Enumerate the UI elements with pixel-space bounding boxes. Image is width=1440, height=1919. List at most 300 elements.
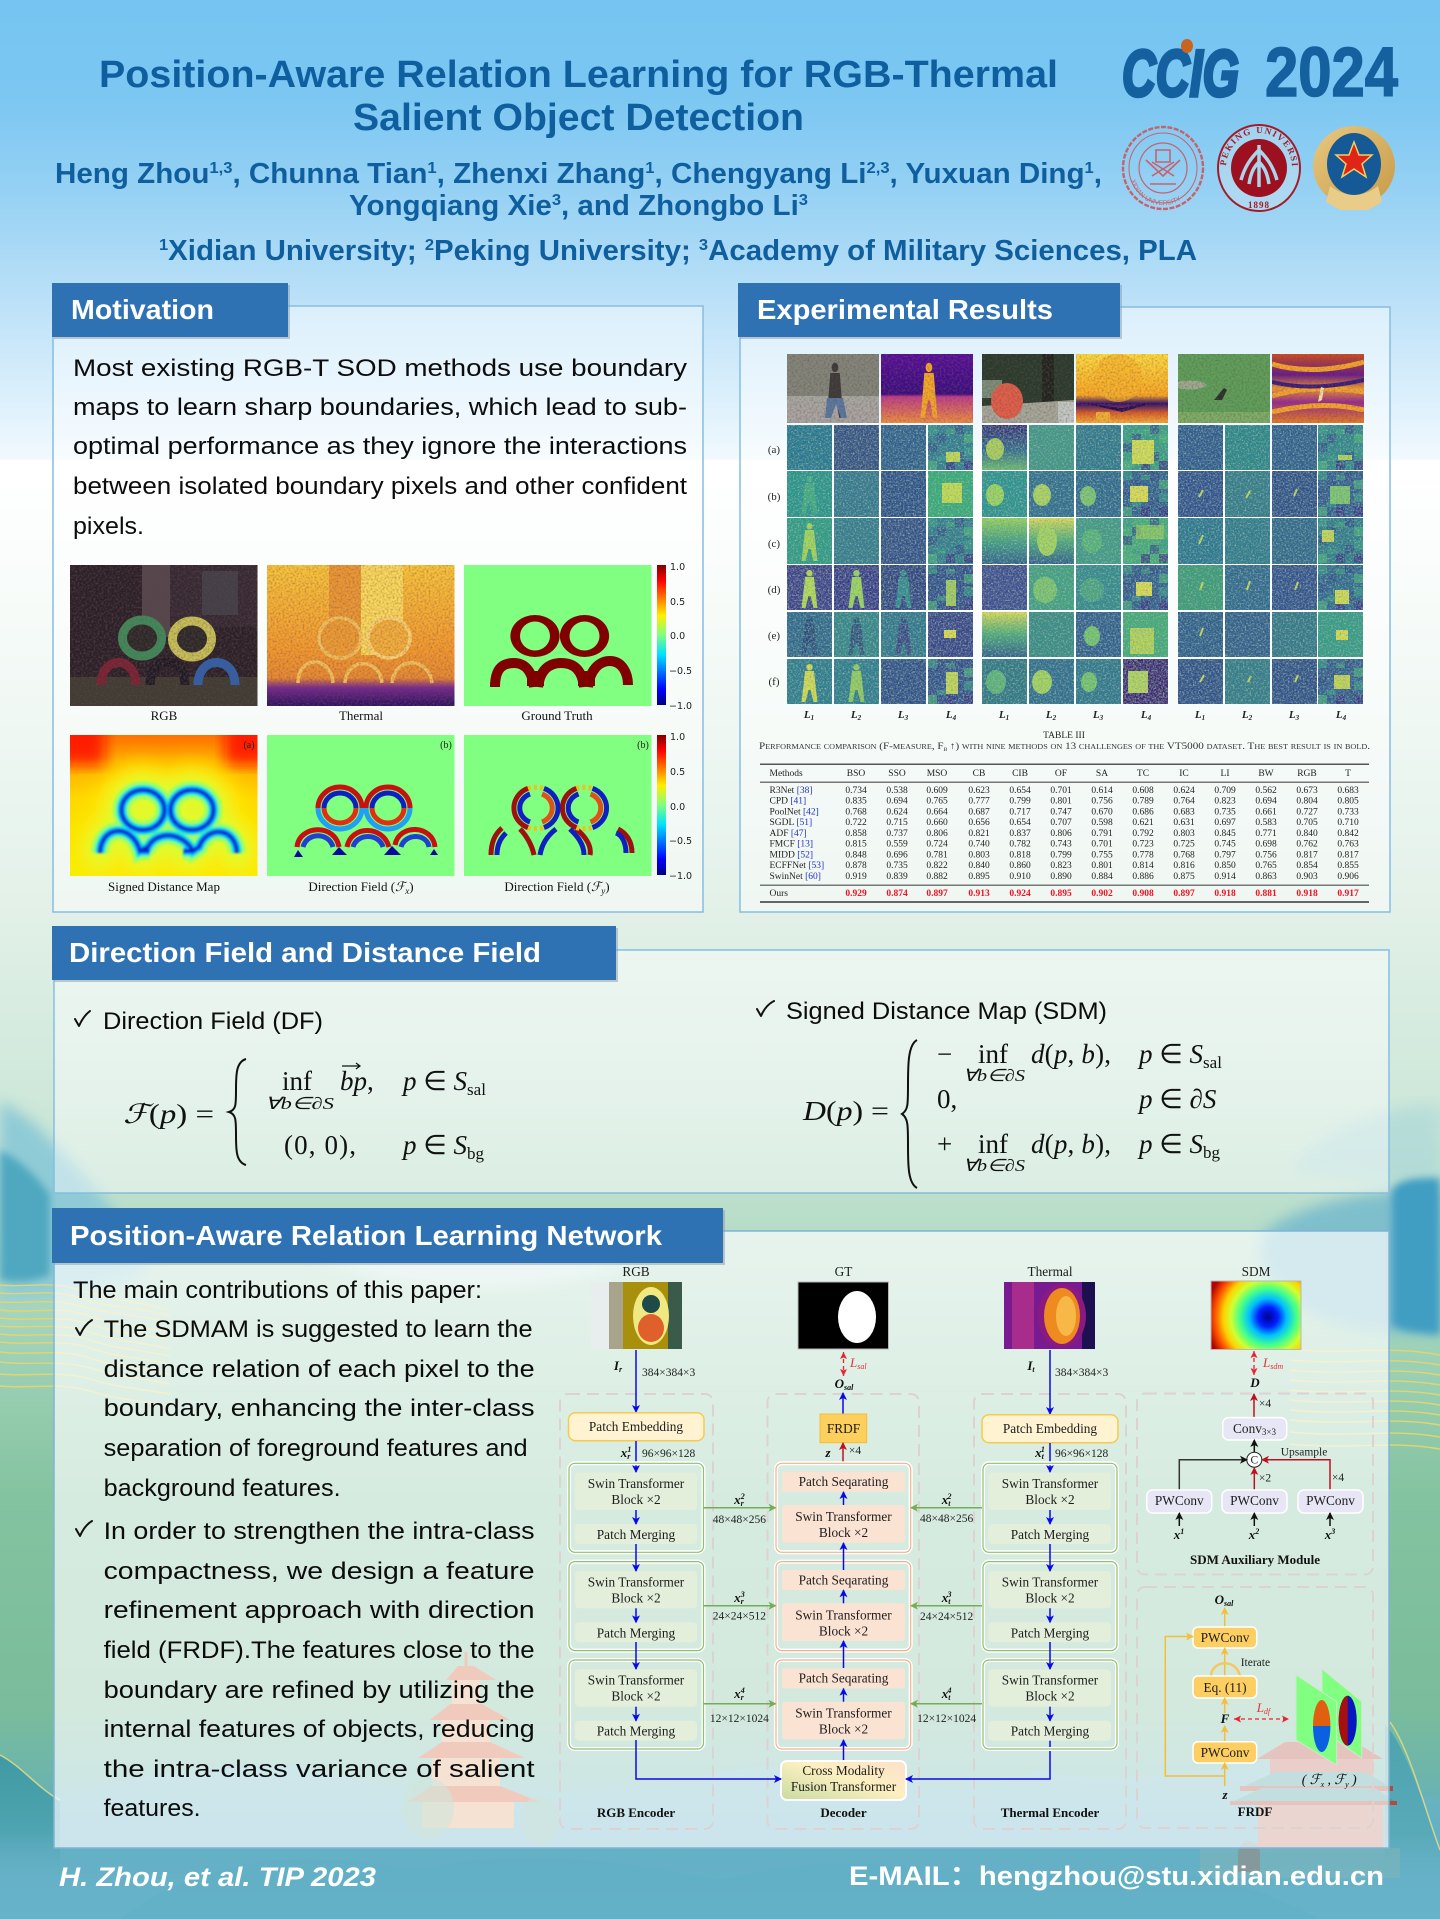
table: performance comparison: 0.803 [968, 850, 990, 860]
FRDF module: PWConv [1201, 1745, 1250, 1760]
SDM auxiliary module: ×2 [1259, 1472, 1271, 1484]
text block: main contributions: compactness, we design a feature [104, 1558, 535, 1585]
skip connections: t [948, 1499, 951, 1508]
skip connections: 2 [946, 1492, 951, 1501]
table: performance comparison: 0.823 [1214, 796, 1236, 806]
table: performance comparison: 0.768 [845, 808, 867, 818]
skip connections [704, 1492, 982, 1725]
table: performance comparison: IC [1179, 769, 1189, 779]
row labels (a)-(f): (e) [768, 630, 780, 642]
table: performance comparison: 0.801 [1091, 861, 1113, 871]
colorbar: bottom row: 0.0 [670, 802, 685, 813]
heading: Experimental Results [738, 283, 1122, 339]
SDM auxiliary module: 2 [1254, 1527, 1259, 1536]
image: direction field Fx: ) [409, 879, 414, 894]
table: performance comparison: 0.897 [926, 889, 948, 899]
affiliations: Xidian University; [168, 235, 425, 267]
formula: direction field: bg [467, 1144, 485, 1163]
colorbar: top row: −0.5 [669, 666, 692, 677]
thermal encoder column: Swin Transformer [1002, 1476, 1099, 1491]
decoder column: Swin Transformer [795, 1509, 892, 1524]
table: performance comparison: CIB [1012, 769, 1028, 779]
text block: main contributions: internal features of objects, reducing [104, 1716, 535, 1743]
decoder column: O [835, 1376, 844, 1391]
table: performance comparison: RGB [1297, 769, 1317, 779]
skip connections: x [942, 1492, 948, 1507]
RGB encoder column: x [621, 1445, 627, 1460]
table: performance comparison: 0.906 [1337, 872, 1359, 882]
diagram: network architecture [560, 1264, 1373, 1829]
table: performance comparison: FMCF [13] [770, 840, 813, 850]
table: performance comparison: 0.881 [1255, 889, 1277, 899]
column labels L1-L4: 3 [1295, 714, 1300, 722]
table: performance comparison: BSO [847, 769, 865, 779]
FRDF module: Eq. (11) [1203, 1680, 1247, 1695]
table: performance comparison: 0.817 [1337, 850, 1359, 860]
formula: direction field: sal [467, 1080, 486, 1099]
row labels (a)-(f): (c) [768, 538, 780, 550]
image: RGB tires: RGB [151, 708, 178, 723]
FRDF module: O [1215, 1592, 1224, 1607]
authors: , [1094, 158, 1102, 190]
cross modality fusion transformer: Fusion Transformer [791, 1779, 897, 1794]
table: performance comparison: MSO [927, 769, 947, 779]
table: performance comparison: 0.837 [1009, 829, 1031, 839]
text block: main contributions: field (FRDF).The features close to the [104, 1637, 535, 1664]
FRDF module: , ℱ [1324, 1773, 1348, 1788]
heading: Motivation: Motivation [71, 294, 214, 325]
skip connections: r [741, 1597, 745, 1606]
table: performance comparison: 0.609 [926, 786, 948, 796]
column labels L1-L4: 2 [1052, 714, 1057, 722]
RGB encoder column: Block ×2 [611, 1689, 661, 1704]
footer: email: E-MAIL：hengzhou@stu.xidian.edu.cn [849, 1861, 1384, 1891]
column labels L1-L4: L [1141, 709, 1148, 721]
column labels L1-L4: L [999, 709, 1006, 721]
SDM auxiliary module: ×4 [1332, 1472, 1344, 1484]
heading: Motivation [52, 283, 290, 339]
table: performance comparison: 0.608 [1132, 786, 1154, 796]
table: performance comparison: 0.694 [1255, 796, 1277, 806]
skip connections: 12×12×1024 [917, 1713, 976, 1725]
table: performance comparison: 0.697 [1214, 818, 1236, 828]
thermal encoder column: I [1027, 1358, 1032, 1373]
colorbar: bottom row: 0.5 [670, 767, 685, 778]
table: performance comparison: SSO [888, 769, 906, 779]
subject silhouettes in maps [802, 438, 1298, 702]
table: performance comparison: 0.913 [968, 889, 990, 899]
table: performance comparison: 0.803 [1173, 829, 1195, 839]
logo: Peking University seal [1217, 124, 1301, 212]
icon: direction field planes [1296, 1669, 1362, 1765]
skip connections: x [942, 1686, 948, 1701]
title: Position-Aware Relation Learning for RGB-Thermal [99, 54, 1058, 96]
column labels L1-L4: 4 [1342, 714, 1347, 722]
FRDF module: L [1257, 1700, 1264, 1715]
table: performance comparison: 0.875 [1173, 872, 1195, 882]
table: performance comparison: 0.771 [1255, 829, 1277, 839]
skip connections: 2 [740, 1492, 745, 1501]
row labels (a)-(f): (a) [768, 444, 780, 456]
text block: motivation paragraph: Most existing RGB-T SOD methods use boundary [73, 355, 688, 382]
row labels (a)-(f): (b) [768, 491, 781, 503]
table: performance comparison: 0.723 [1132, 840, 1154, 850]
row labels (a)-(f) [768, 444, 781, 688]
table: performance comparison: R3Net [38] [770, 786, 813, 796]
table: performance comparison: 0.835 [845, 796, 867, 806]
skip connections: x [734, 1686, 741, 1701]
colorbar: top row [657, 562, 692, 712]
SDM auxiliary module: 3×3 [1262, 1427, 1276, 1437]
image: signed distance map: (a) [243, 740, 255, 751]
image: direction field Fx: x [404, 886, 409, 896]
table: performance comparison: 0.705 [1296, 818, 1318, 828]
RGB encoder column [568, 1350, 704, 1820]
skip connections: t [948, 1597, 951, 1606]
table: performance comparison: 0.860 [1009, 861, 1031, 871]
image: thermal tires: Thermal [339, 708, 383, 723]
authors: 1 [645, 160, 655, 177]
decoder column: Block ×2 [819, 1722, 868, 1737]
SDM auxiliary module: SDM Auxiliary Module [1190, 1552, 1320, 1567]
column labels L1-L4: 4 [952, 714, 957, 722]
skip connections: 3 [946, 1590, 951, 1599]
formula: direction field: ∀b∈∂ S [265, 1094, 335, 1113]
formula: signed distance map: bg [1203, 1143, 1221, 1162]
text block: motivation paragraph: between isolated boundary pixels and other confident [73, 473, 687, 500]
table: performance comparison: 0.687 [968, 808, 990, 818]
decoder column: sal [857, 1362, 867, 1371]
image: direction field Fy [464, 735, 652, 896]
table: performance comparison: 0.895 [968, 872, 990, 882]
table: performance comparison: 0.792 [1132, 829, 1154, 839]
table: performance comparison: 0.816 [1173, 861, 1195, 871]
table: performance comparison: MIDD [52] [770, 850, 813, 860]
formula: signed distance map: p ∈ ∂S [1137, 1084, 1217, 1114]
SDM auxiliary module: sdm [1270, 1362, 1283, 1371]
column labels L1-L4: 4 [1147, 714, 1152, 722]
logo: CCIG 2024 [1122, 33, 1398, 111]
title [99, 54, 1058, 139]
table: performance comparison: SwinNet [60] [770, 872, 821, 882]
table: performance comparison: 0.717 [1009, 808, 1031, 818]
table: performance comparison: 0.882 [926, 872, 948, 882]
FRDF module: z [1221, 1787, 1228, 1802]
formula: signed distance map: d(p, b), [1031, 1039, 1111, 1069]
thermal encoder column: Block ×2 [1025, 1590, 1075, 1605]
RGB encoder column: Patch Embedding [589, 1419, 683, 1434]
SDM auxiliary module: Conv [1233, 1421, 1262, 1436]
table: performance comparison: 0.743 [1050, 840, 1072, 850]
panel: Motivation [52, 283, 703, 912]
table: performance comparison: 0.765 [1255, 861, 1277, 871]
heading: Experimental Results: Experimental Results [757, 294, 1053, 325]
table: performance comparison: 0.817 [1296, 850, 1318, 860]
table caption: TABLE III [1043, 731, 1085, 741]
table: performance comparison: CB [973, 769, 985, 779]
table: performance comparison: T [1345, 769, 1351, 779]
table caption [759, 731, 1370, 753]
table: performance comparison: 0.848 [845, 850, 867, 860]
table: performance comparison: 0.735 [886, 861, 908, 871]
table: performance comparison: 0.919 [845, 872, 867, 882]
colorbar: bottom row: 1.0 [670, 732, 685, 743]
SDM auxiliary module [1147, 1351, 1363, 1567]
table: performance comparison: OF [1055, 769, 1067, 779]
authors: 3 [552, 192, 561, 209]
column labels L1-L4: L [1195, 709, 1202, 721]
thermal encoder column: Patch Merging [1011, 1724, 1090, 1739]
image: ground truth: Ground Truth [521, 708, 593, 723]
colorbar: bottom row: −0.5 [669, 836, 692, 847]
table: performance comparison: 0.614 [1091, 786, 1113, 796]
RGB encoder column: 96×96×128 [642, 1448, 695, 1460]
skip connections: 12×12×1024 [710, 1713, 769, 1725]
formula: direction field: p ∈ S [403, 1130, 467, 1160]
decoder column: sal [843, 1383, 854, 1392]
skip connections: 4 [740, 1686, 745, 1695]
table: performance comparison: 0.805 [1337, 796, 1359, 806]
text: Direction Field label: Direction Field (DF) [103, 1008, 323, 1035]
RGB encoder column: Swin Transformer [588, 1673, 685, 1688]
decoder column: Patch Seqarating [799, 1474, 889, 1489]
image: direction field Fy: Direction Field (ℱ [504, 879, 601, 894]
formula: signed distance map: D(p) = [802, 1096, 889, 1126]
table: performance comparison: 0.821 [968, 829, 990, 839]
decoder column: ×4 [849, 1445, 861, 1457]
table: performance comparison: 0.624 [1173, 786, 1195, 796]
column labels L1-L4: 1 [1202, 714, 1205, 722]
table: performance comparison: 0.694 [886, 796, 908, 806]
image: thermal tires [267, 565, 454, 723]
RGB encoder column: 1 [627, 1445, 631, 1454]
table: performance comparison: 0.654 [1009, 818, 1031, 828]
SDM auxiliary module: 3 [1330, 1527, 1335, 1536]
table: performance comparison: 0.845 [1214, 829, 1236, 839]
table: performance comparison: 0.763 [1337, 840, 1359, 850]
FRDF module: PWConv [1201, 1630, 1250, 1645]
input: thermal image [1004, 1264, 1095, 1349]
authors: 1 [1085, 160, 1094, 177]
table: performance comparison: 0.745 [1214, 840, 1236, 850]
table: performance comparison: 0.804 [1296, 796, 1318, 806]
heading: Direction Field and Distance Field: Direction Field and Distance Field [69, 937, 541, 968]
column labels L1-L4: L [1046, 709, 1053, 721]
authors: , Yuxuan Ding [890, 158, 1085, 190]
column labels L1-L4: L [851, 709, 858, 721]
thermal encoder column: Patch Merging [1011, 1527, 1090, 1542]
table: performance comparison: 0.756 [1255, 850, 1277, 860]
image row: RGB and thermal photo pairs [787, 354, 1364, 423]
column labels L1-L4: L [1093, 709, 1100, 721]
RGB encoder column: r [627, 1452, 631, 1461]
table: performance comparison: 0.797 [1214, 850, 1236, 860]
table: performance comparison: 0.929 [845, 889, 867, 899]
logo: Xidian University seal: XIDIAN UNIVERSITY [1132, 179, 1180, 206]
thermal encoder column: 384×384×3 [1055, 1367, 1108, 1379]
table: performance comparison: 0.559 [886, 840, 908, 850]
SDM auxiliary module: C [1250, 1454, 1258, 1466]
heatmap grid: feature maps L1-L4 [787, 425, 1363, 704]
RGB encoder column: Swin Transformer [588, 1574, 685, 1589]
cross modality fusion transformer [636, 1740, 1050, 1800]
thermal encoder column: x [1035, 1445, 1042, 1460]
table: performance comparison: 0.855 [1337, 861, 1359, 871]
table: performance comparison: 0.734 [845, 786, 867, 796]
table: performance comparison: 0.806 [1050, 829, 1072, 839]
column labels L1-L4: 3 [1099, 714, 1104, 722]
table: performance comparison: 0.683 [1173, 808, 1195, 818]
logo: Academy of Military Sciences emblem [1313, 126, 1395, 210]
table: performance comparison: 0.799 [1050, 850, 1072, 860]
formula: signed distance map: d(p, b), [1031, 1129, 1111, 1159]
affiliations [159, 235, 1197, 267]
RGB encoder column: Patch Merging [597, 1625, 676, 1640]
SDM auxiliary module: PWConv [1230, 1493, 1279, 1508]
table: performance comparison: 0.631 [1173, 818, 1195, 828]
SDM auxiliary module: PWConv [1306, 1493, 1355, 1508]
formula: direction field: (0, 0), [284, 1130, 356, 1160]
RGB encoder column: Patch Merging [597, 1724, 676, 1739]
table: performance comparison: 0.623 [968, 786, 990, 796]
table: performance comparison: 0.918 [1296, 889, 1318, 899]
table: performance comparison: 0.670 [1091, 808, 1113, 818]
table: performance comparison: 0.624 [886, 808, 908, 818]
table: performance comparison: PoolNet [42] [770, 808, 819, 818]
table: performance comparison: 0.698 [1255, 840, 1277, 850]
authors: Heng Zhou [55, 158, 204, 190]
thermal encoder column: Patch Embedding [1003, 1421, 1097, 1436]
table: performance comparison: 0.583 [1255, 818, 1277, 828]
SDM auxiliary module: 1 [1180, 1527, 1184, 1536]
footer: citation: H. Zhou, et al. TIP 2023 [59, 1862, 376, 1892]
table: performance comparison: 0.878 [845, 861, 867, 871]
FRDF module: FRDF [1238, 1804, 1272, 1819]
table caption: Performance comparison (F-measure, F [759, 742, 917, 752]
image: RGB tires [70, 565, 258, 723]
authors [55, 158, 1102, 222]
decoder column: L [850, 1355, 857, 1370]
table: performance comparison: Ours [770, 889, 788, 899]
logo: CCIG 2024: CCIG [1122, 36, 1239, 110]
table: performance comparison: 0.806 [926, 829, 948, 839]
table: performance comparison: ADF [47] [770, 829, 807, 839]
table: performance comparison: 0.725 [1173, 840, 1195, 850]
table: performance comparison: 0.917 [1337, 889, 1359, 899]
heading: Position-Aware Relation Learning Network [52, 1208, 725, 1265]
formula: signed distance map: p ∈ S [1139, 1039, 1203, 1069]
formula: direction field: bp, [340, 1066, 374, 1096]
table: performance comparison: 0.701 [1050, 786, 1072, 796]
table: performance comparison: 0.858 [845, 829, 867, 839]
decoder column: Swin Transformer [795, 1607, 892, 1622]
table: performance comparison: 0.823 [1050, 861, 1072, 871]
table: performance comparison: 0.768 [1173, 850, 1195, 860]
column labels L1-L4: 2 [857, 714, 862, 722]
FRDF module: df [1264, 1707, 1272, 1716]
table: performance comparison: SGDL [51] [770, 818, 812, 828]
table: performance comparison: 0.707 [1050, 818, 1072, 828]
table: performance comparison: 0.782 [1009, 840, 1031, 850]
text block: main contributions: refinement approach with direction [104, 1597, 535, 1624]
table: performance comparison: 0.924 [1009, 889, 1031, 899]
colorbar: bottom row: −1.0 [669, 871, 692, 882]
SDM auxiliary module: x [1174, 1527, 1180, 1542]
authors: 1,3 [209, 160, 233, 177]
input: thermal image: Thermal [1027, 1264, 1073, 1279]
formula: signed distance map [802, 1039, 1222, 1188]
logo: Peking University seal: 1898 [1248, 200, 1270, 210]
RGB encoder column: r [619, 1365, 623, 1374]
decoder column: Swin Transformer [795, 1706, 892, 1721]
colorbar: bottom row [657, 732, 692, 882]
table: performance comparison: 0.562 [1255, 786, 1277, 796]
formula: signed distance map: p ∈ S [1139, 1129, 1203, 1159]
table: performance comparison: 0.747 [1050, 808, 1072, 818]
output: SDM image: SDM [1242, 1264, 1271, 1279]
table: performance comparison: 0.903 [1296, 872, 1318, 882]
text block: main contributions: features. [104, 1795, 201, 1822]
text block: main contributions [73, 1277, 535, 1822]
row labels (a)-(f): (d) [768, 584, 781, 596]
table: performance comparison: CPD [41] [770, 796, 806, 806]
thermal encoder column: Patch Merging [1011, 1625, 1090, 1640]
table: performance comparison: 0.818 [1009, 850, 1031, 860]
table caption: ↑) with nine methods on 13 challenges of the VT5000 dataset. The best result is in bold. [947, 741, 1370, 752]
table: performance comparison: 0.789 [1132, 796, 1154, 806]
thermal encoder column [982, 1350, 1118, 1820]
table: performance comparison: 0.886 [1132, 872, 1154, 882]
table: performance comparison: 0.737 [886, 829, 908, 839]
RGB encoder column: Swin Transformer [588, 1476, 685, 1491]
thermal encoder column: t [1042, 1452, 1045, 1461]
illustration: large pagoda [1200, 1742, 1400, 1878]
table: performance comparison: 0.733 [1337, 808, 1359, 818]
RGB encoder column: Patch Merging [597, 1527, 676, 1542]
table: performance comparison: 0.874 [886, 889, 908, 899]
input: ground truth image: GT [835, 1264, 852, 1279]
text block: main contributions: distance relation of each pixel to the [104, 1356, 535, 1383]
table: performance comparison: 0.724 [926, 840, 948, 850]
affiliations: Peking University; [434, 235, 699, 267]
image: direction field Fy: (b) [637, 740, 649, 751]
table: performance comparison: 0.910 [1009, 872, 1031, 882]
cross modality fusion transformer: Cross Modality [802, 1763, 885, 1778]
column labels L1-L4: 1 [811, 714, 814, 722]
table: performance comparison: 0.850 [1214, 861, 1236, 871]
formula: signed distance map: − [937, 1039, 952, 1069]
colorbar: top row: −1.0 [669, 701, 692, 712]
thermal encoder column: Thermal Encoder [1001, 1805, 1100, 1820]
text block: main contributions: In order to strengthen the intra-class [104, 1518, 535, 1545]
authors: , Chunna Tian [232, 158, 427, 190]
table: performance comparison: 0.715 [886, 818, 908, 828]
table: performance comparison: 0.656 [968, 818, 990, 828]
panel: Direction Field and Distance Field [52, 926, 1389, 1193]
image: direction field Fx [267, 735, 454, 896]
text block: motivation paragraph: optimal performance as they ignore the interactions [73, 433, 687, 460]
SDM auxiliary module: Upsample [1281, 1446, 1327, 1458]
thermal encoder column: Block ×2 [1025, 1689, 1075, 1704]
thermal encoder column: 1 [1041, 1445, 1045, 1454]
skip connections: x [734, 1590, 741, 1605]
table: performance comparison: 0.897 [1173, 889, 1195, 899]
logo: CCIG 2024: 2024 [1265, 33, 1398, 111]
authors: 2,3 [866, 160, 890, 177]
table: performance comparison: LI [1221, 769, 1229, 779]
table: performance comparison: BW [1258, 769, 1274, 779]
column labels L1-L4: L [1289, 709, 1296, 721]
